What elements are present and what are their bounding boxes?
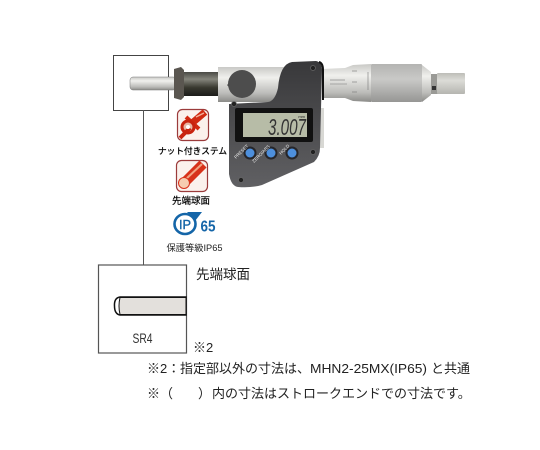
button: zero/abs xyxy=(264,146,278,160)
heading: spherical tip: 先端球面 xyxy=(196,267,250,282)
screws xyxy=(232,66,316,182)
button: preset xyxy=(244,146,256,160)
footnote 1: ※2： xyxy=(147,361,180,376)
icon: nut-equipped stem xyxy=(178,110,208,140)
display housing xyxy=(229,61,322,187)
footnote 1: 指定部以外の寸法は、 xyxy=(180,361,310,376)
knurled thimble xyxy=(371,64,422,102)
LCD reading: 3.007 xyxy=(268,114,307,140)
ratchet neck xyxy=(431,74,438,94)
connector line between detail boxes xyxy=(142,110,144,265)
button labels: PRESET xyxy=(233,143,250,160)
icon: spherical tip xyxy=(176,160,208,192)
clamp knob xyxy=(227,70,256,98)
button labels xyxy=(233,143,291,164)
icon: IP65 xyxy=(174,212,216,236)
display frame xyxy=(235,108,313,142)
thimble sleeve xyxy=(322,64,371,102)
footnote 1: と共通 xyxy=(431,361,470,376)
note mark: ※2 xyxy=(193,340,213,355)
footnote 2: （ xyxy=(160,386,173,401)
button labels: ZERO/ABS xyxy=(251,144,271,164)
housing edge xyxy=(319,62,323,100)
barrel xyxy=(218,67,284,102)
SR4 label: SR4 xyxy=(132,330,153,346)
side plate xyxy=(318,108,324,148)
cone xyxy=(422,65,431,102)
digital micrometer head xyxy=(130,61,465,187)
unit mark: mm xyxy=(298,114,306,119)
lock nut collar xyxy=(174,67,184,100)
label: IP65 protection class: 保護等級IP65 xyxy=(166,242,222,253)
button: hold xyxy=(286,146,298,160)
detail box around spindle tip xyxy=(114,56,168,110)
label: spherical tip: 先端球面 xyxy=(172,195,210,207)
footnote 1: MHN2-25MX(IP65) xyxy=(310,361,427,376)
icon: IP65: 65 xyxy=(200,218,216,236)
footnote 2: 内の寸法はストロークエンドでの寸法です。 xyxy=(212,386,471,401)
icon: IP65: IP xyxy=(179,217,191,232)
LCD screen xyxy=(243,113,307,137)
footnote 2: ※ xyxy=(147,386,160,401)
tip drawing xyxy=(114,297,186,315)
thimble graduations xyxy=(330,71,368,92)
spindle xyxy=(130,77,176,90)
stem xyxy=(184,72,218,96)
ratchet xyxy=(437,73,465,94)
button labels: HOLD xyxy=(278,143,291,156)
panel: spherical tip detail xyxy=(98,265,186,353)
label: nut-equipped stem: ナット付きステム xyxy=(158,146,227,156)
footnote 2: ） xyxy=(198,386,211,401)
